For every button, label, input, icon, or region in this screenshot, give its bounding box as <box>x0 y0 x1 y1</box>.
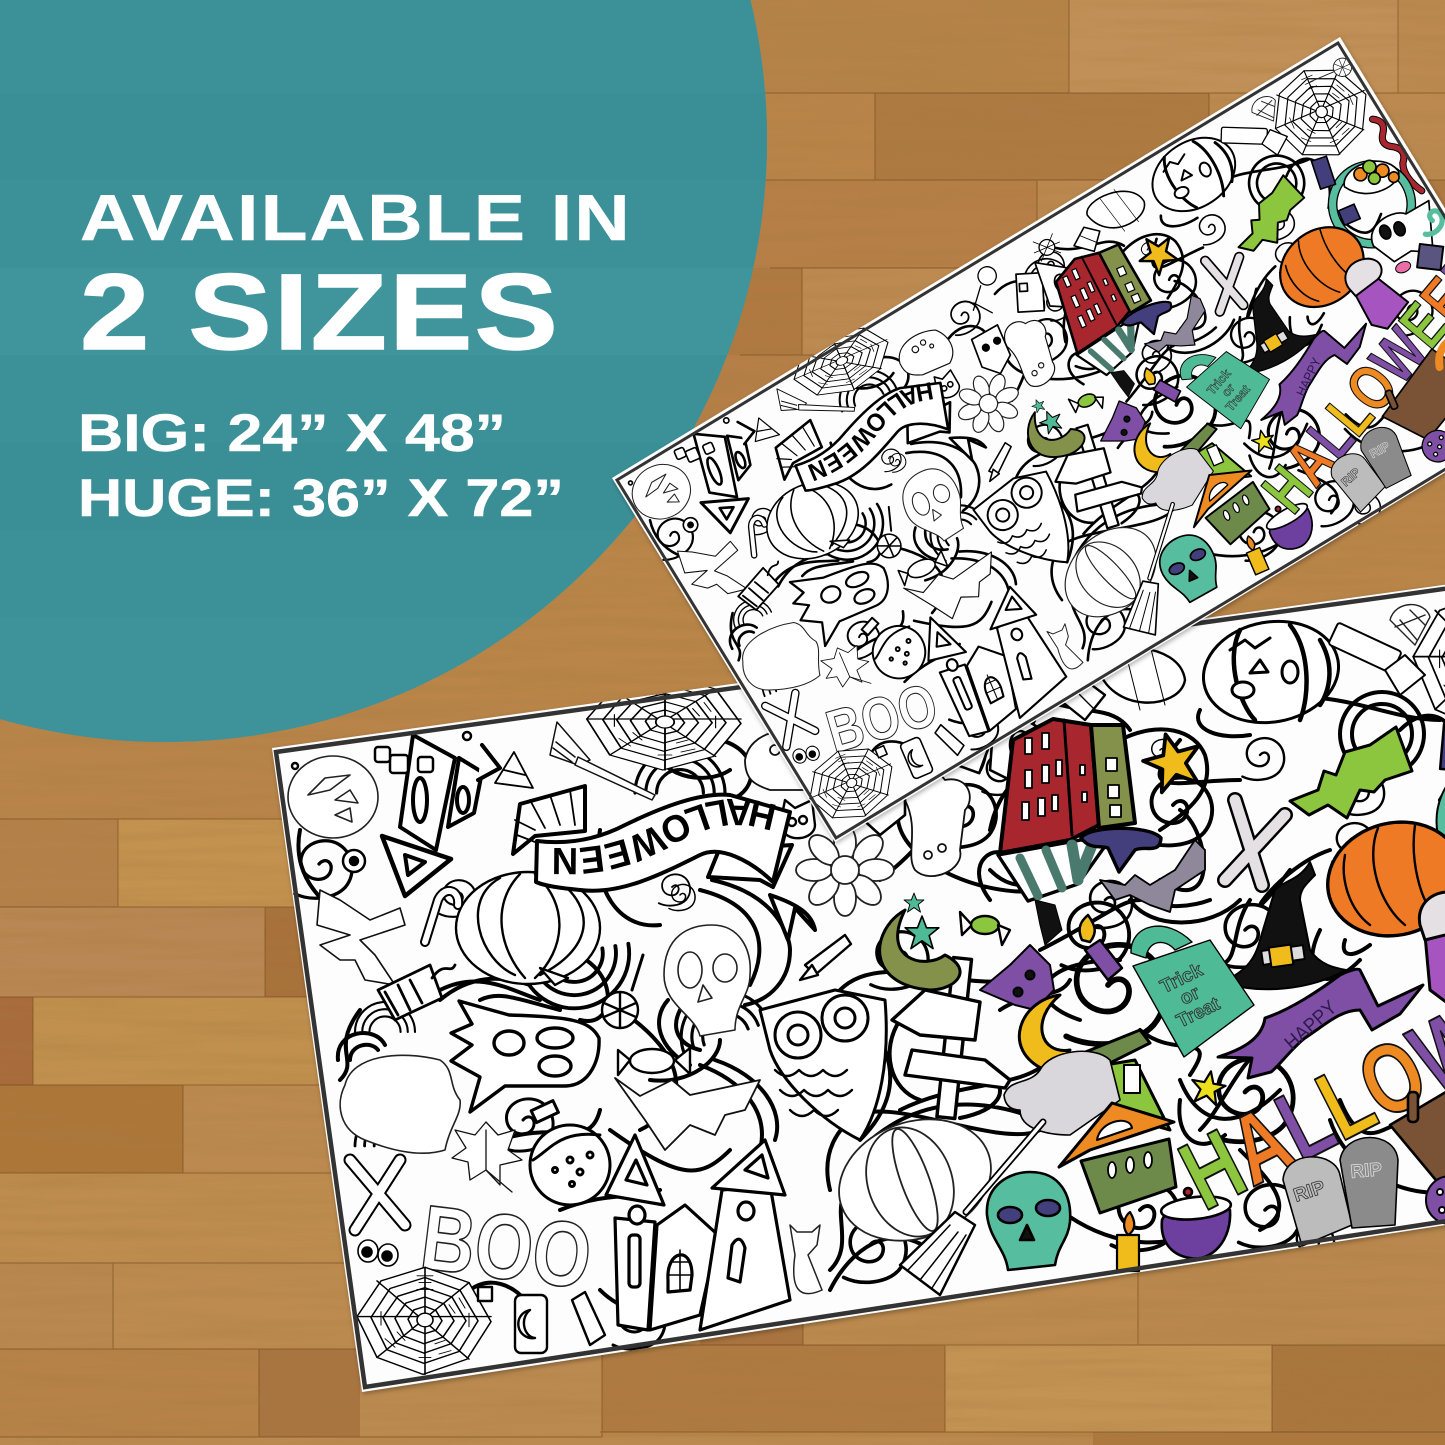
teal skull <box>987 1172 1070 1270</box>
googly eyes <box>358 1240 398 1266</box>
bat outline <box>615 1078 760 1150</box>
spirals <box>295 693 1445 1349</box>
white hand ghost <box>905 772 970 876</box>
trick or treat bag <box>1131 926 1254 1057</box>
green tower <box>1078 1030 1170 1130</box>
yellow small star <box>1189 1068 1228 1106</box>
owl <box>760 990 886 1140</box>
green bat <box>1290 727 1412 818</box>
dark candy box <box>1440 724 1445 834</box>
huge size line: HUGE: 36” X 72” <box>78 469 564 528</box>
ghost <box>451 1001 599 1112</box>
teal ring <box>1443 761 1445 881</box>
Boo lettering: BOO <box>416 1187 597 1309</box>
happy purple ribbon: HAPPY <box>1281 997 1341 1054</box>
acorn <box>1390 605 1430 645</box>
small black bat <box>1035 900 1062 945</box>
candy corn <box>495 752 533 788</box>
background swirl lines <box>298 690 1445 1350</box>
grey bat <box>1100 840 1205 912</box>
potion flask <box>530 1101 610 1205</box>
ribbon tails behind banner <box>513 786 815 940</box>
witch hat <box>1222 862 1346 989</box>
big size line: BIG: 24” X 48” <box>78 404 506 463</box>
purple potion bottle <box>1419 892 1445 1005</box>
wrapped candy <box>618 1048 690 1075</box>
headline text block <box>78 181 632 528</box>
indigo hat curl <box>1081 828 1161 872</box>
jack-o-lantern outline <box>288 756 378 838</box>
RIP tombstones <box>1283 1138 1398 1246</box>
white pot and candy behind <box>1060 645 1185 720</box>
teal stars <box>904 893 939 949</box>
broom <box>900 1122 1043 1295</box>
jar and candle <box>478 1287 605 1353</box>
small tower outline <box>942 700 1050 790</box>
RIP tombstones: RIP <box>1291 1177 1328 1207</box>
red building <box>1000 719 1135 853</box>
candle stick <box>378 965 455 1020</box>
grey-white bones <box>1225 800 1285 885</box>
teal circle panel <box>0 0 800 760</box>
eyeball and small squares <box>292 732 471 872</box>
thick ring spiral <box>1340 692 1424 776</box>
purple cauldron <box>1160 1179 1232 1258</box>
heading line 1: AVAILABLE IN <box>80 181 632 254</box>
green candy <box>960 912 1010 945</box>
lollipop face and spider <box>972 233 1062 314</box>
pumpkin top outline <box>1195 611 1347 733</box>
olive crescent moon <box>880 910 960 990</box>
cat head blob <box>780 800 815 838</box>
yellow crescent moon <box>1019 995 1070 1070</box>
yellow star <box>1138 727 1207 795</box>
candy cane <box>425 891 458 942</box>
haunted houses <box>606 1135 790 1330</box>
heading line 2: 2 SIZES <box>80 251 560 372</box>
pencil <box>800 935 851 980</box>
bottom spider web <box>357 1267 491 1374</box>
white skull <box>664 925 750 1036</box>
green house with orange roof <box>1059 1103 1176 1213</box>
white candle near web <box>1328 622 1425 695</box>
lower poster: big size <box>271 584 1445 1396</box>
signpost <box>892 958 1010 1119</box>
trick or treat bag: Trick <box>1157 960 1207 998</box>
white pumpkin <box>456 872 600 985</box>
orange pumpkin <box>1315 807 1445 951</box>
pumpkin flower <box>796 825 894 916</box>
purple mask <box>980 945 1054 1010</box>
upper poster: huge size <box>582 31 1445 851</box>
grey smoke cloud <box>1004 1051 1120 1135</box>
purple dotted ball <box>1426 1176 1445 1224</box>
trick or treat bag: Treat <box>1173 993 1224 1032</box>
maple leaf <box>452 1122 522 1192</box>
haunted tower <box>382 735 500 896</box>
purple candle <box>1080 915 1122 980</box>
outline bear blob <box>745 730 828 790</box>
yellow candle <box>1117 1212 1139 1271</box>
cat outline <box>790 1225 822 1294</box>
cauldron outline <box>340 1055 460 1153</box>
striped awning <box>998 840 1108 901</box>
broom outline <box>550 722 655 800</box>
crossed bones <box>350 1160 405 1230</box>
ghost cat eyes <box>858 765 905 835</box>
right spider web <box>1413 593 1445 731</box>
top spider web <box>587 676 741 770</box>
lollipop <box>602 955 643 1028</box>
Halloween banner: HALLOWEEN <box>554 798 776 874</box>
RIP tombstones: RIP <box>1350 1159 1383 1183</box>
happy purple ribbon <box>1218 969 1423 1078</box>
brown wooden sign <box>1390 1060 1445 1185</box>
striped pumpkin outline <box>822 1099 1008 1261</box>
poster artwork <box>287 552 1445 1376</box>
hand tree outline <box>317 890 405 985</box>
trick or treat bag: or <box>1177 982 1204 1010</box>
